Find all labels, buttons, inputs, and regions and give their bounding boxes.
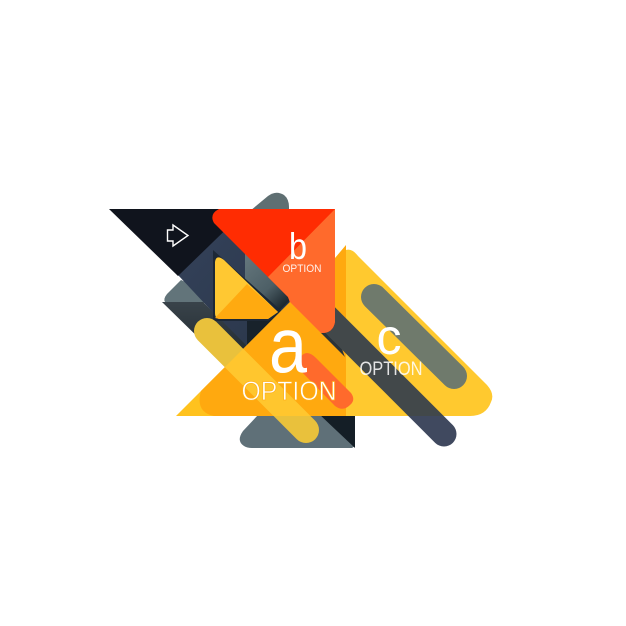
lower left dark triangle bbox=[162, 302, 250, 388]
icon: outline arrow bbox=[168, 225, 188, 246]
panel c: yellow triangle bbox=[335, 245, 492, 416]
dark lower tab bbox=[247, 318, 276, 348]
label b: b bbox=[289, 226, 307, 267]
navy diamond panel bbox=[178, 220, 293, 350]
geometric infographic bbox=[109, 192, 492, 448]
dark upper triangle bbox=[109, 209, 246, 276]
bottom gray rounded shape bbox=[240, 415, 355, 448]
label a: OPTION bbox=[242, 376, 336, 406]
label b bbox=[282, 226, 322, 275]
dark long diagonal capsule bbox=[300, 290, 444, 434]
top gray rounded shape bbox=[250, 193, 289, 240]
label c: c bbox=[376, 309, 402, 365]
label c: OPTION bbox=[360, 358, 422, 380]
panel b: red and orange rounded triangle bbox=[212, 209, 335, 333]
bottom dark triangle bbox=[320, 415, 355, 448]
gray capsule on yellow bbox=[374, 297, 454, 376]
left gray rounded shape bbox=[164, 280, 215, 303]
panel a: orange triangle bbox=[176, 302, 353, 430]
translucent yellow capsule bbox=[207, 331, 306, 430]
teal band along red edge bbox=[245, 250, 292, 313]
label a bbox=[242, 301, 336, 406]
small yellow triangle bbox=[213, 250, 285, 321]
label a: a bbox=[269, 301, 308, 389]
red-orange capsule bbox=[298, 353, 353, 409]
label c bbox=[360, 309, 422, 380]
label b: OPTION bbox=[282, 263, 322, 275]
